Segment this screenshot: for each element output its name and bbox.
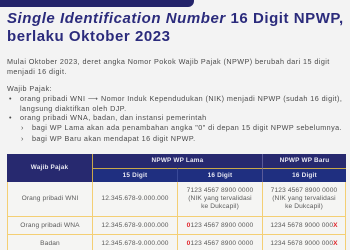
intro text: menjadi 16 digit. xyxy=(7,66,67,76)
title: Single Identification Number 16 Digit NPWP, xyxy=(7,10,344,27)
title: berlaku Oktober 2023 xyxy=(7,28,171,45)
sub-bullet: old taxpayers: › xyxy=(21,123,24,132)
cell: WNI 15 digit xyxy=(92,182,177,217)
NPWP comparison table xyxy=(7,154,346,250)
cell: WNI 16 digit old: 7123 4567 8900 0000 xyxy=(187,187,253,194)
bullet: WNI: orang pribadi WNI ⟶ Nomor Induk Kependudukan (NIK) menjadi NPWP (sudah 16 digit), xyxy=(20,94,342,103)
header: 16 Digit new xyxy=(262,168,346,182)
cell: WNA 15 digit: 12.345.678-9.000.000 xyxy=(101,222,169,228)
header: Wajib Pajak: Wajib Pajak xyxy=(31,164,68,171)
cell: Badan 16 digit old xyxy=(177,235,262,250)
row label: WNA xyxy=(7,217,92,235)
cell: WNI 16 digit old: ke Dukcapil) xyxy=(201,203,239,210)
header: NPWP WP Baru xyxy=(262,154,346,168)
cell: WNA 16 digit old: 0123 4567 8900 0000 xyxy=(187,222,253,228)
sub-bullet: new taxpayers: › xyxy=(21,134,24,143)
cell: WNI 16 digit old: (NIK yang tervalidasi xyxy=(188,195,252,202)
cell: WNA 16 digit old xyxy=(177,217,262,235)
bullet: WNI xyxy=(9,94,342,112)
sub-bullet: old taxpayers: bagi WP Lama akan ada penambahan angka "0" di depan 15 digit NPWP sebelumnya. xyxy=(32,123,342,132)
cell: WNA 16 digit new: 1234 5678 9000 000X xyxy=(270,222,338,228)
title xyxy=(7,10,344,45)
header: NPWP WP Lama: NPWP WP Lama xyxy=(152,157,203,164)
bullet: WNA: • xyxy=(9,113,12,122)
row label: Badan: Badan xyxy=(40,240,60,247)
row label: WNI: Orang pribadi WNI xyxy=(22,195,78,202)
header: 15 Digit xyxy=(92,168,177,182)
cell: WNI 16 digit new: 7123 4567 8900 0000 xyxy=(271,187,337,194)
cell: WNI 16 digit old xyxy=(177,182,262,217)
taxpayer rules list xyxy=(7,84,342,143)
intro text: Mulai Oktober 2023, deret angka Nomor Pokok Wajib Pajak (NPWP) berubah dari 15 digit xyxy=(7,57,330,66)
row label: WNI xyxy=(7,182,92,217)
cell: Badan 15 digit xyxy=(92,235,177,250)
bullet: WNI: • xyxy=(9,94,12,103)
header: Wajib Pajak xyxy=(7,154,92,182)
row label: Badan xyxy=(7,235,92,250)
intro text xyxy=(7,57,330,76)
row label: WNA: Orang pribadi WNA xyxy=(20,222,80,228)
cell: WNI 16 digit new: (NIK yang tervalidasi xyxy=(272,195,336,202)
sub-bullet: new taxpayers: bagi WP Baru akan mendapat 16 digit NPWP. xyxy=(32,134,196,143)
header: NPWP WP Lama xyxy=(92,154,262,168)
bullet: WNI: langsung diaktifkan oleh DJP. xyxy=(20,104,127,112)
list heading: Wajib Pajak: xyxy=(7,84,52,93)
bullet: WNA: orang pribadi WNA, badan, dan instansi pemerintah xyxy=(20,113,207,122)
cell: Badan 16 digit old: 0123 4567 8900 0000 xyxy=(187,240,253,247)
cell: WNI 16 digit new: ke Dukcapil) xyxy=(285,203,323,210)
cell: Badan 15 digit: 12.345.678-9.000.000 xyxy=(101,240,169,247)
cell: WNA 15 digit xyxy=(92,217,177,235)
header: 15 Digit: 15 Digit xyxy=(123,172,147,178)
header: NPWP WP Baru: NPWP WP Baru xyxy=(280,157,329,164)
top banner xyxy=(0,0,194,7)
cell: WNA 16 digit new xyxy=(262,217,346,235)
cell: WNI 15 digit: 12.345.678-9.000.000 xyxy=(101,195,169,202)
cell: WNI 16 digit new xyxy=(262,182,346,217)
header: 16 Digit old xyxy=(177,168,262,182)
cell: Badan 16 digit new xyxy=(262,235,346,250)
header: 16 Digit old: 16 Digit xyxy=(208,172,232,178)
cell: Badan 16 digit new: 1234 5678 9000 000X xyxy=(270,240,338,247)
header: 16 Digit new: 16 Digit xyxy=(292,172,317,178)
